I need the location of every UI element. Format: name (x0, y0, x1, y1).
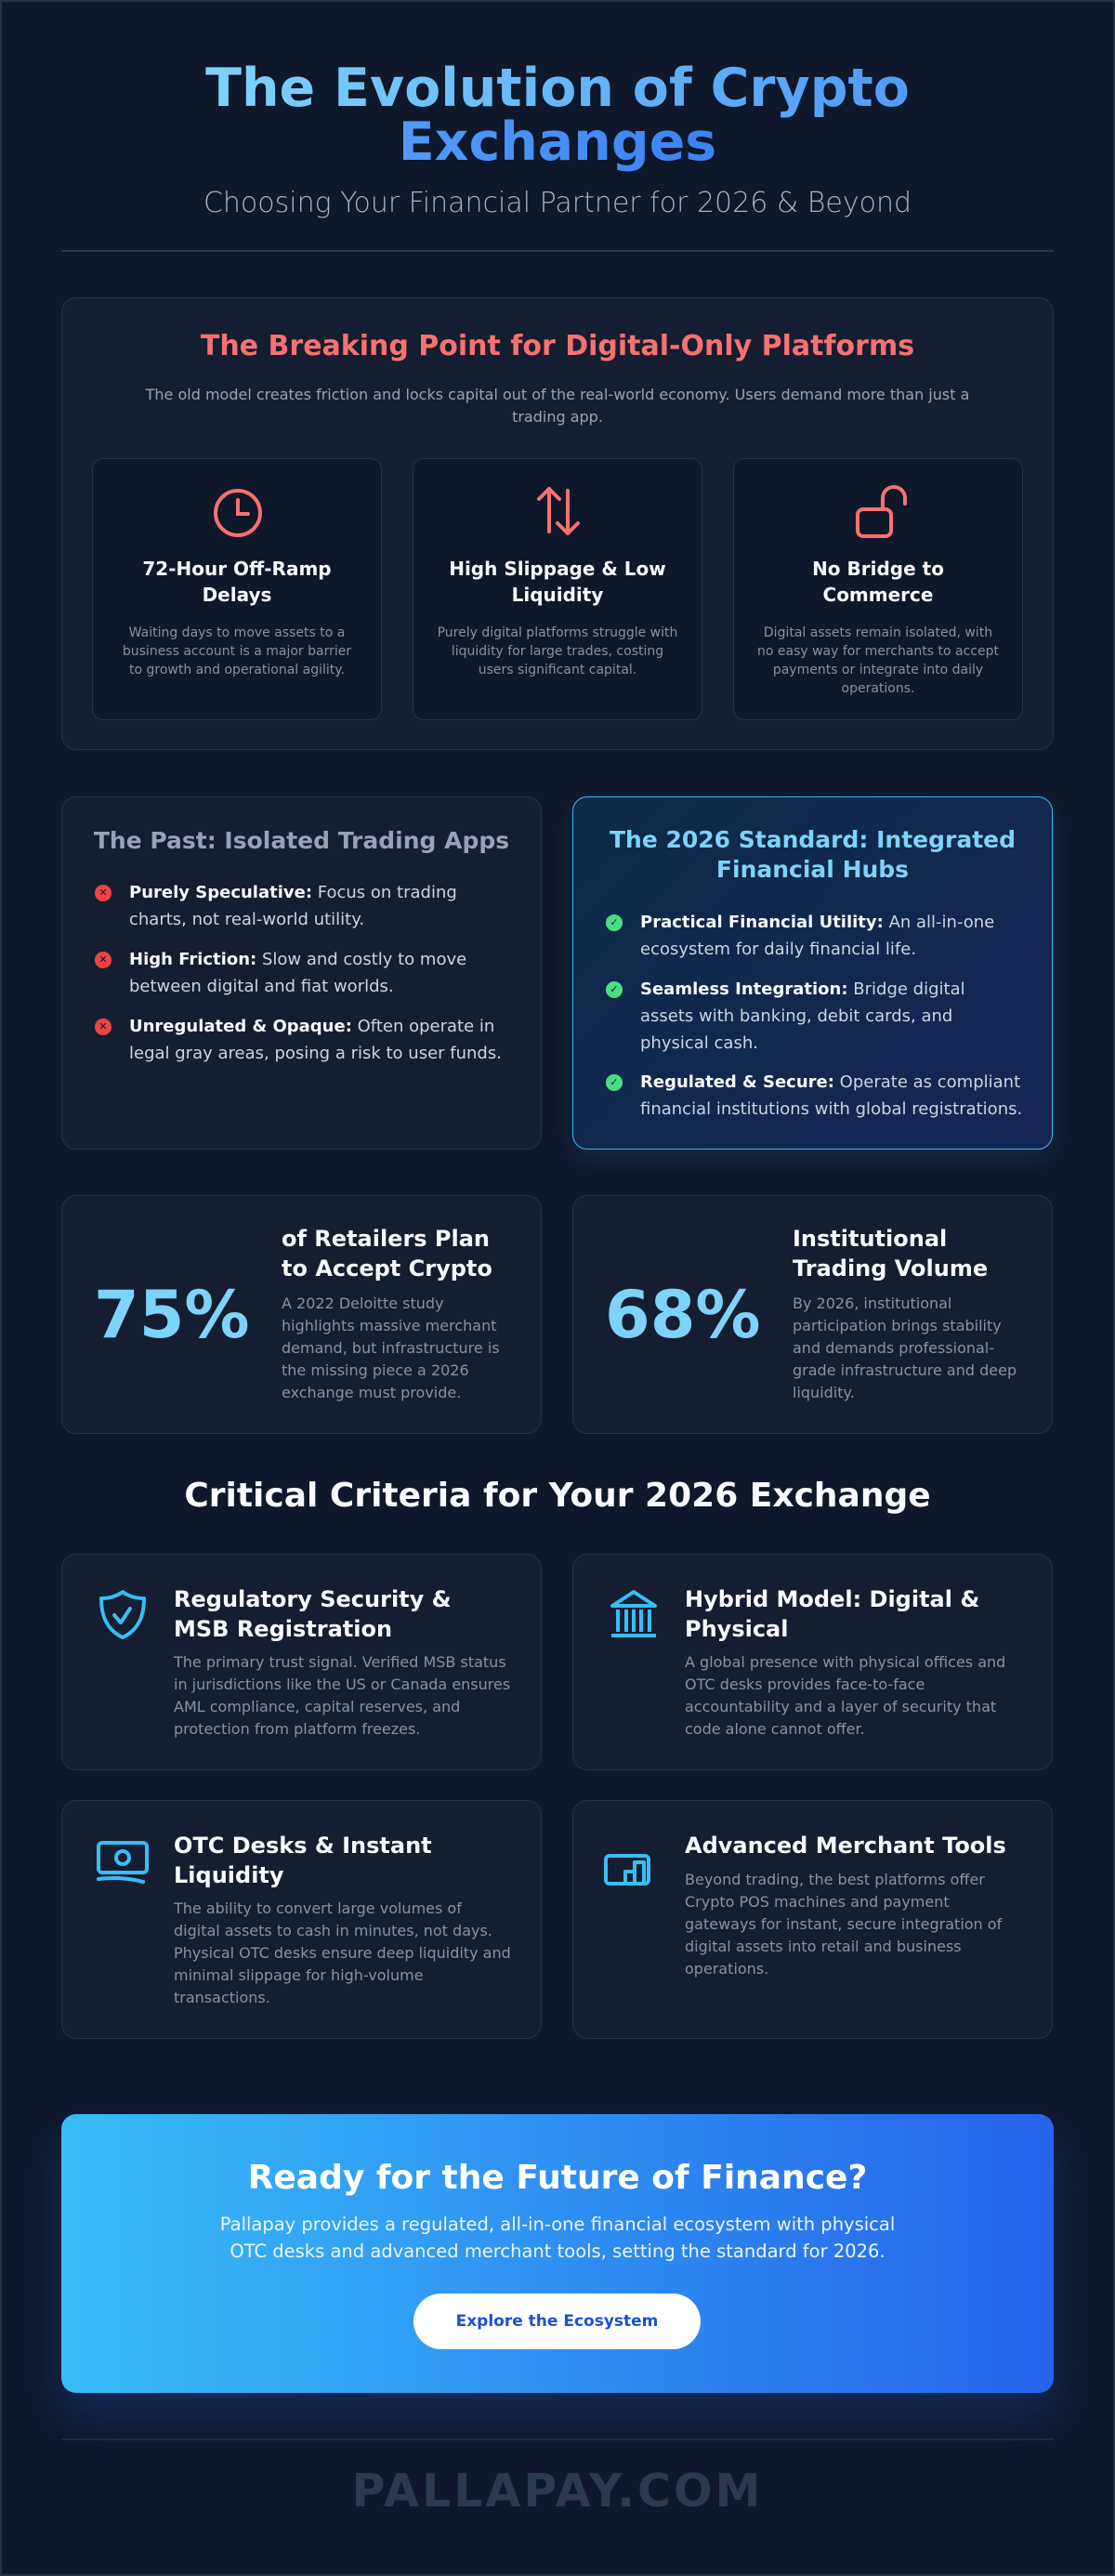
CTA heading: Ready for the Future of Finance? (248, 2159, 867, 2197)
icon: money (97, 1841, 149, 1884)
panel: 2026 standard: Regulated & Secure: Operate as compliant financial institutions with global registrations. (640, 1072, 1022, 1119)
card: slippage (413, 458, 702, 720)
panel: 2026 standard: Practical Financial Utility: An all-in-one ecosystem for daily financial life. (640, 913, 994, 959)
card: OTC desks: OTC Desks & Instant Liquidity (174, 1833, 432, 1888)
item: utility (606, 914, 623, 931)
heading: the past: The Past: Isolated Trading Apps (94, 827, 509, 854)
card: hybrid model: Hybrid Model: Digital & Physical (685, 1586, 979, 1642)
panel: 2026 standard: Seamless Integration: Bridge digital assets with banking, debit cards, and physical cash. (640, 979, 965, 1053)
callout: CTA (61, 2114, 1054, 2393)
icon: unlocked padlock (856, 485, 907, 538)
card: off-ramp delays: 72-Hour Off-Ramp Delays (142, 558, 332, 606)
icon: shield (99, 1590, 146, 1639)
stat: 68%: 68% (605, 1277, 761, 1353)
panel heading: The Breaking Point for Digital-Only Platforms (201, 330, 914, 362)
item: regulated: ✓ (610, 1076, 619, 1088)
panel: the past: Purely Speculative: Focus on trading charts, not real-world utility. (129, 883, 457, 929)
item: speculative: ✕ (98, 887, 108, 899)
stat: 75% (61, 1195, 542, 1434)
button (413, 2293, 701, 2349)
subtitle: Choosing Your Financial Partner for 2026 & Beyond (203, 187, 912, 219)
card: slippage: High Slippage & Low Liquidity (449, 558, 666, 606)
stat: 75%: A 2022 Deloitte study highlights massive merchant demand, but infrastructure is the missing piece a 2026 exchange must provide. (282, 1295, 500, 1401)
card: OTC desks: The ability to convert large volumes of (174, 1899, 462, 1917)
stat: 75%: of Retailers Plan to Accept Crypto (282, 1226, 492, 1281)
card: regulatory security: Regulatory Security & MSB Registration (174, 1586, 452, 1642)
card: merchant tools: Advanced Merchant Tools (685, 1833, 1006, 1859)
heading: critical criteria: Critical Criteria for Your 2026 Exchange (184, 1477, 931, 1515)
icon: clock (214, 489, 262, 537)
heading: 2026 standard: The 2026 Standard: Integrated Financial Hubs (610, 826, 1016, 883)
icon: arrows up down (537, 487, 580, 535)
panel: the past (61, 796, 542, 1150)
stat: 75%: 75% (94, 1277, 250, 1353)
card: merchant tools: Beyond trading, the best platforms offer Crypto POS machines and payment gateways for instant, secure integration of digital assets into retail and business operations. (685, 1871, 1002, 1978)
item: friction (95, 952, 112, 968)
item: integration (606, 981, 623, 998)
card: no bridge (733, 458, 1023, 720)
item: utility: ✓ (610, 916, 619, 928)
card: OTC desks (61, 1800, 542, 2039)
stat: 68%: By 2026, institutional participation brings stability and demands professional-grade infrastructure and deep liquidity. (793, 1295, 1017, 1401)
panel: 2026 standard (572, 796, 1053, 1150)
card: regulatory security: The primary trust signal. Verified MSB status in jurisdictions like the US or Canada ensures AML compliance, capital reserves, and protection from platform freezes. (174, 1653, 510, 1738)
icon: pos terminal (604, 1854, 650, 1886)
card: no bridge: Commerce (823, 584, 933, 606)
panel: breaking point (61, 297, 1054, 750)
panel: the past: High Friction: Slow and costly to move between digital and fiat worlds. (129, 950, 466, 996)
card: hybrid model: A global presence with physical offices and OTC desks provides face-to-face accountability and a layer of security that code alone cannot offer. (685, 1653, 1005, 1738)
item: regulated (606, 1074, 623, 1091)
item: speculative (95, 885, 112, 901)
item: integration: ✓ (610, 983, 619, 995)
card: no bridge: No Bridge to (812, 558, 944, 580)
card: hybrid model (572, 1554, 1053, 1770)
panel: the past: Unregulated & Opaque: Often operate in legal gray areas, posing a risk to user funds. (129, 1017, 502, 1063)
card: no bridge: Digital assets remain isolated, with no easy way for merchants to accept payments or integrate into daily operations. (757, 625, 999, 696)
card: off-ramp delays: Waiting days to move assets to a business account is a major barrier to growth and operational agility. (123, 625, 351, 677)
item: friction: ✕ (98, 953, 108, 966)
card: OTC desks: digital assets to cash in minutes, not days. Physical OTC desks ensure deep liquidity and minimal slippage for high-volume transactions. (174, 1922, 511, 2006)
card: slippage: Purely digital platforms struggle with liquidity for large trades, costing users significant capital. (438, 625, 677, 677)
title: The Evolution of Crypto (205, 58, 910, 119)
card: regulatory security (61, 1554, 542, 1770)
title (205, 58, 910, 173)
card: off-ramp delays (92, 458, 382, 720)
title: Exchanges (399, 112, 716, 173)
item: unregulated: ✕ (98, 1020, 108, 1032)
item: unregulated (95, 1019, 112, 1035)
stat: 68% (572, 1195, 1053, 1434)
button: Explore the Ecosystem (456, 2312, 658, 2331)
stat: 68%: Institutional Trading Volume (793, 1226, 988, 1281)
CTA text: Pallapay provides a regulated, all-in-one financial ecosystem with physical OTC desks and advanced merchant tools, setting the standard for 2026. (220, 2214, 895, 2262)
icon: bank (610, 1590, 658, 1637)
panel description: The old model creates friction and locks capital out of the real-world economy. Users demand more than just a trading app. (146, 386, 969, 426)
card: merchant tools (572, 1800, 1053, 2039)
footer brand: PALLAPAY.COM (352, 2464, 763, 2517)
